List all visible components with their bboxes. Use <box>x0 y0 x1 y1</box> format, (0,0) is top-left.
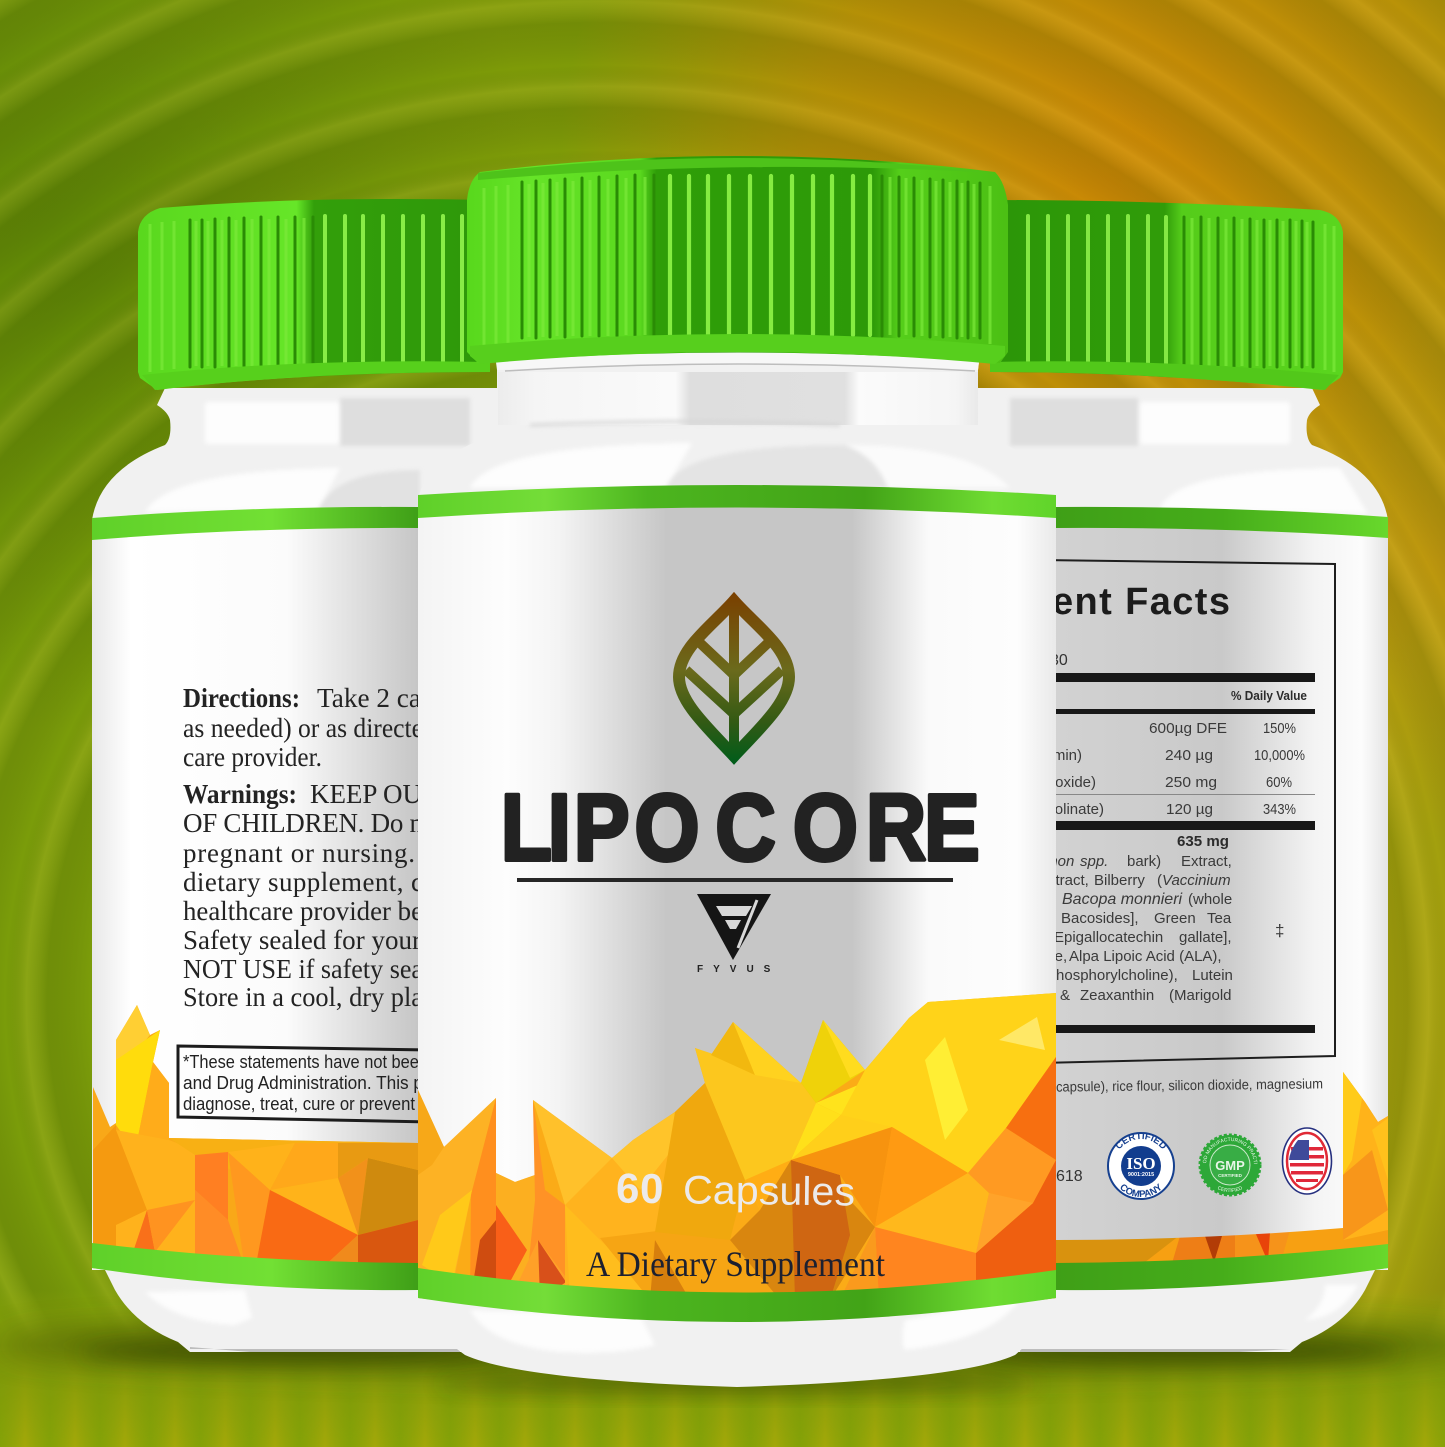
leaf logo <box>679 601 789 758</box>
proprietary blend ingredients: Bacopa monnieri <box>1062 891 1183 908</box>
directions and warnings text: as needed) or as directe <box>183 713 423 743</box>
nutrient rows: (as oxide) <box>1030 774 1096 791</box>
other ingredients line: capsule), rice flour, silicon dioxide, magnesium <box>1056 1075 1323 1095</box>
FDA disclaimer box: and Drug Administration. This p <box>183 1073 423 1093</box>
proprietary blend ingredients: Extract, <box>1038 872 1089 889</box>
proprietary blend ingredients <box>1006 853 1284 1004</box>
directions and warnings text: care provider. <box>183 742 322 772</box>
proprietary blend ingredients: ‡ <box>1275 921 1284 940</box>
badge: GMP certified: GOOD MANUFACTURING PRACTICE <box>1202 1138 1258 1164</box>
badge: ISO certified: CERTIFIED <box>1116 1134 1166 1148</box>
nutrient rows: 240 µg <box>1165 747 1213 764</box>
badge: ISO certified: 9001:2015 <box>1128 1172 1154 1178</box>
directions and warnings text: healthcare provider be <box>183 896 423 926</box>
nutrient rows: picolinate) <box>1036 801 1104 818</box>
FYVUS logo: FYVUS <box>697 964 780 975</box>
proprietary blend ingredients: Green <box>1154 910 1196 927</box>
center bottle green cap <box>467 156 1008 364</box>
supplement facts panel: 635 mg <box>1177 834 1229 850</box>
proprietary blend ingredients: Tea <box>1207 910 1232 927</box>
badge: USA flag <box>1282 1128 1332 1194</box>
directions and warnings text: KEEP OU <box>310 779 422 809</box>
directions and warnings text: Safety sealed for your <box>183 925 421 955</box>
proprietary blend ingredients: Bilberry <box>1094 872 1145 889</box>
badge: ISO certified: COMPANY <box>1120 1183 1161 1198</box>
right bottle green cap <box>990 200 1343 390</box>
center polygon art <box>418 993 1056 1320</box>
proprietary blend ingredients: Zeaxanthin <box>1080 987 1154 1004</box>
badge: GMP certified: CERTIFIED <box>1218 1186 1242 1192</box>
left bottle body <box>92 388 500 1352</box>
proprietary blend ingredients: Epigallocatechin <box>1054 929 1163 946</box>
proprietary blend ingredients: Bacosides], <box>1061 910 1139 927</box>
center bottom green band <box>418 1268 1056 1322</box>
nutrient rows: 343% <box>1263 801 1296 818</box>
supplement facts panel: 30 <box>1050 652 1068 669</box>
right polygon art <box>1056 1072 1388 1272</box>
capsule count: 60 <box>616 1165 664 1212</box>
proprietary blend ingredients: bark) <box>1127 853 1161 870</box>
center top green band <box>418 485 1056 518</box>
directions and warnings text: NOT USE if safety sea <box>183 954 423 984</box>
nutrient rows <box>1005 720 1315 818</box>
supplement facts panel: 618 <box>1056 1168 1083 1185</box>
nutrient rows: 250 mg <box>1165 774 1217 791</box>
directions and warnings text: Directions: <box>183 683 300 713</box>
left bottle green cap <box>138 199 490 390</box>
directions and warnings text: OF CHILDREN. Do n <box>183 808 424 838</box>
proprietary blend ingredients: Alpa Lipoic Acid (ALA), <box>1069 948 1222 965</box>
nutrient rows: 60% <box>1266 774 1292 791</box>
directions and warnings text: Take 2 ca <box>317 683 421 713</box>
nutrient rows: Cobalamin) <box>1005 747 1082 764</box>
badge: ISO certified <box>1107 1132 1175 1200</box>
badge: GMP certified: GMP <box>1215 1158 1245 1173</box>
left polygon art <box>93 1005 418 1280</box>
proprietary blend ingredients: ( <box>1157 872 1162 889</box>
panel heading: ient Facts <box>1040 581 1231 623</box>
FDA disclaimer box: diagnose, treat, cure or prevent <box>183 1094 415 1114</box>
proprietary blend ingredients: Phosphorylcholine), <box>1046 967 1178 984</box>
center bottle: front label <box>418 342 1056 1392</box>
proprietary blend ingredients: & <box>1060 987 1070 1004</box>
nutrient rows: 120 µg <box>1166 801 1213 818</box>
nutrient rows: 600µg DFE <box>1149 720 1227 737</box>
left bottle label <box>92 500 418 1300</box>
left bottle green bands <box>92 507 418 1290</box>
proprietary blend ingredients: Vaccinium <box>1162 872 1231 889</box>
right bottle green bands <box>1056 507 1388 1290</box>
directions and warnings text: Warnings: <box>183 779 297 809</box>
FDA disclaimer box: *These statements have not been <box>183 1052 428 1072</box>
proprietary blend ingredients: Cinnamon <box>1006 853 1074 870</box>
FYVUS logo <box>697 894 780 975</box>
badge: ISO certified: ISO <box>1126 1154 1156 1173</box>
brand name: LIPOCORE <box>501 774 980 880</box>
right bottle label <box>1056 500 1388 1300</box>
proprietary blend ingredients: Lutein <box>1192 967 1233 984</box>
supplement facts panel: % Daily Value <box>1231 689 1307 703</box>
badge: GMP certified: CERTIFIED <box>1218 1173 1243 1178</box>
center label <box>418 480 1056 1340</box>
supplement facts panel <box>1005 560 1335 1185</box>
divider under brand name <box>517 878 953 882</box>
proprietary blend ingredients: (whole <box>1188 891 1232 908</box>
nutrient rows: 10,000% <box>1254 747 1305 764</box>
FDA disclaimer box <box>178 1046 430 1122</box>
proprietary blend ingredients: Extract, <box>1181 853 1232 870</box>
right bottle body <box>950 388 1388 1352</box>
left bottle: back label with directions <box>80 388 500 1362</box>
badge: GMP certified <box>1198 1134 1262 1196</box>
directions and warnings text: pregnant or nursing. <box>183 838 415 868</box>
dietary supplement line: A Dietary Supplement <box>586 1244 885 1284</box>
proprietary blend ingredients: ine, <box>1043 948 1067 965</box>
proprietary blend ingredients: spp. <box>1080 853 1108 870</box>
right bottle: supplement facts <box>975 388 1392 1372</box>
center bottle body <box>418 342 1056 1387</box>
nutrient rows: 150% <box>1263 720 1296 737</box>
capsule count: Capsules <box>683 1168 855 1214</box>
directions and warnings text <box>183 683 424 1012</box>
proprietary blend ingredients: (Marigold <box>1169 987 1232 1004</box>
directions and warnings text: dietary supplement, c <box>183 867 423 897</box>
proprietary blend ingredients: gallate], <box>1179 929 1232 946</box>
directions and warnings text: Store in a cool, dry pla <box>183 982 423 1012</box>
